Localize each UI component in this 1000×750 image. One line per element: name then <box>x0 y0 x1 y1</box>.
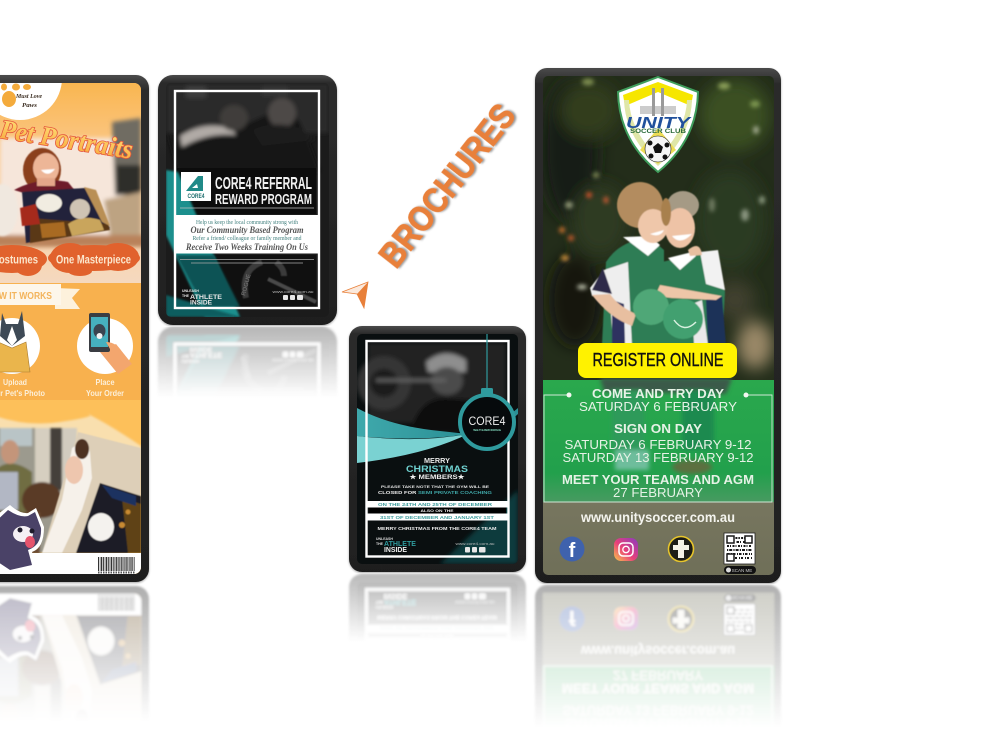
teal diagonal <box>166 170 240 317</box>
reflection: christmas notice brochure <box>348 574 527 635</box>
logo: unity soccer club shield <box>618 77 698 172</box>
icon: facebook <box>560 536 584 562</box>
painting held by woman <box>20 187 110 243</box>
white frame <box>366 341 508 556</box>
sticker: purple dog <box>0 505 44 574</box>
dates strip: ALSO ON THE <box>420 509 455 513</box>
tagline: unleash the athlete inside: INSIDE <box>384 547 407 554</box>
footer strip <box>0 553 141 574</box>
event: sign on day: SATURDAY 6 FEBRUARY 9-12 <box>564 437 752 452</box>
ornament: core4 bauble: HEALTH & PERFORMANCE <box>473 429 501 432</box>
website and social icons: www.core4.com.au <box>456 542 494 546</box>
balloon smile <box>674 320 696 328</box>
info box outline <box>544 392 772 502</box>
lower dark band <box>177 255 316 307</box>
lower rules <box>180 259 314 260</box>
rules <box>180 208 314 209</box>
label: brochures: BROCHURES <box>372 97 523 275</box>
website: www.unitysoccer.com.au <box>580 510 735 525</box>
qr code <box>724 533 755 564</box>
tagline: unleash the athlete inside: UNLEASH <box>182 289 199 293</box>
white text block: Refer a friend/ colleague or family member and <box>192 235 302 242</box>
tagline: unleash the athlete inside: THE <box>376 542 384 546</box>
event: sign on day <box>562 421 754 465</box>
gym photo <box>166 83 328 150</box>
event: sign on day: SATURDAY 13 FEBRUARY 9-12 <box>562 450 754 465</box>
logo: core4 <box>181 172 211 201</box>
photo backdrop <box>0 118 145 247</box>
notice text <box>378 485 492 496</box>
heading ribbon: how it works <box>0 284 80 309</box>
teal waves <box>357 408 518 463</box>
tagline: unleash the athlete inside: THE <box>182 294 190 298</box>
cloud label: one masterpiece: One Masterpiece <box>56 254 131 266</box>
event: meet your teams and agm <box>562 472 754 500</box>
reflection: soccer club brochure <box>534 585 782 713</box>
sign-off: MERRY CHRISTMAS FROM THE CORE4 TEAM <box>378 526 497 531</box>
icon: club badge <box>668 536 694 562</box>
event: sign on day: SIGN ON DAY <box>614 421 702 436</box>
panel: unity soccer club brochure <box>535 68 781 583</box>
ornament: core4 bauble <box>460 333 514 449</box>
logo: must love paws: Must Love <box>15 93 42 100</box>
reflection: referral program brochure <box>156 327 338 390</box>
tagline: unleash the athlete inside: ATHLETE <box>190 294 223 301</box>
photo: man with dog <box>0 428 77 554</box>
lower notice content <box>367 485 508 554</box>
barcode <box>98 564 135 572</box>
button: register online <box>578 343 737 378</box>
step label: your order: Your Order <box>86 388 125 398</box>
event: come and try day: SATURDAY 6 FEBRUARY <box>579 399 737 414</box>
event: come and try day: COME AND TRY DAY <box>592 386 724 401</box>
boys' legs <box>600 378 732 474</box>
tagline: unleash the athlete inside <box>182 289 223 306</box>
ground <box>543 502 774 577</box>
icon: phone in hand <box>77 313 133 374</box>
event: meet your teams and agm: MEET YOUR TEAMS AND AGM <box>562 472 754 487</box>
icon: upload pet photo <box>0 311 40 374</box>
heading: merry christmas members: CHRISTMAS <box>406 464 468 474</box>
blurred foliage background <box>542 78 773 369</box>
website and social icons: www.core4.com.au <box>272 289 314 294</box>
dates strip <box>367 501 508 520</box>
white text block: Receive Two Weeks Training On Us <box>185 242 308 252</box>
white text block: Help us keep the local community strong with <box>196 219 299 226</box>
plate lettering: ROGUE <box>241 274 253 297</box>
panel: christmas notice brochure <box>349 326 526 572</box>
scan me pill <box>724 566 756 574</box>
cloud label: one masterpiece <box>48 243 140 276</box>
photo: two boys hugging <box>590 182 726 345</box>
grass field <box>543 380 774 504</box>
logo: unity soccer club shield: SOCCER CLUB <box>630 129 687 135</box>
title: pet portraits: Pet Portraits <box>0 114 135 165</box>
black band behind heading <box>177 168 316 214</box>
lower info block <box>560 421 756 574</box>
white dog at left <box>0 184 10 238</box>
heading: merry christmas members <box>406 458 468 481</box>
event: meet your teams and agm: 27 FEBRUARY <box>613 485 703 500</box>
event: come and try day <box>579 386 737 414</box>
ornament: core4 bauble: CORE4 <box>468 414 506 428</box>
logo: core4: CORE4 <box>188 194 205 200</box>
panel: pet portraits brochure <box>0 36 149 582</box>
icon: instagram <box>614 538 638 561</box>
notice text: PLEASE TAKE NOTE THAT THE GYM WILL BE <box>381 485 490 489</box>
logo: must love paws <box>0 83 62 120</box>
woman <box>14 148 76 198</box>
heading: merry christmas members: ★ MEMBERS★ <box>410 473 466 481</box>
website and social icons <box>456 542 494 552</box>
heading: core4 referral reward program: REWARD PROGRAM <box>215 192 312 208</box>
notice text: CLOSED FOR SEMI PRIVATE COACHING <box>378 490 492 496</box>
step label: upload: Upload <box>3 377 27 387</box>
reflection: pet portraits brochure <box>0 584 150 708</box>
white text block <box>176 215 318 254</box>
barbell plate <box>245 262 316 302</box>
step label: place: Place <box>96 377 115 387</box>
white text block: Our Community Based Program <box>190 225 304 235</box>
logo: unity soccer club shield: UNITY <box>626 115 692 132</box>
white frame <box>175 91 319 308</box>
tagline: unleash the athlete inside: INSIDE <box>190 300 213 306</box>
logo: must love paws: Paws <box>22 102 37 109</box>
tagline: unleash the athlete inside <box>376 537 416 554</box>
heading: core4 referral reward program <box>215 177 312 204</box>
icon: facebook: f <box>569 540 576 562</box>
dates strip: ON THE 24TH AND 25TH OF DECEMBER <box>378 502 493 507</box>
cloud label: costumes <box>0 245 47 276</box>
button: register online: REGISTER ONLINE <box>592 350 724 370</box>
heading: merry christmas members: MERRY <box>424 458 450 465</box>
arrow: pointer <box>342 282 368 308</box>
heading: core4 referral reward program: CORE4 REFERRAL <box>215 173 312 193</box>
tagline: unleash the athlete inside: ATHLETE <box>384 541 416 548</box>
panel: core4 referral brochure <box>158 75 337 325</box>
tagline: unleash the athlete inside: UNLEASH <box>376 537 393 541</box>
photo: woman with canvas <box>42 432 141 553</box>
scan me pill: SCAN ME <box>732 568 752 573</box>
website and social icons <box>272 289 314 300</box>
lower photos and footer <box>0 428 141 574</box>
gym photo <box>357 343 506 432</box>
dates strip: 31ST OF DECEMBER AND JANUARY 1ST <box>380 515 494 520</box>
lower band <box>0 400 141 574</box>
